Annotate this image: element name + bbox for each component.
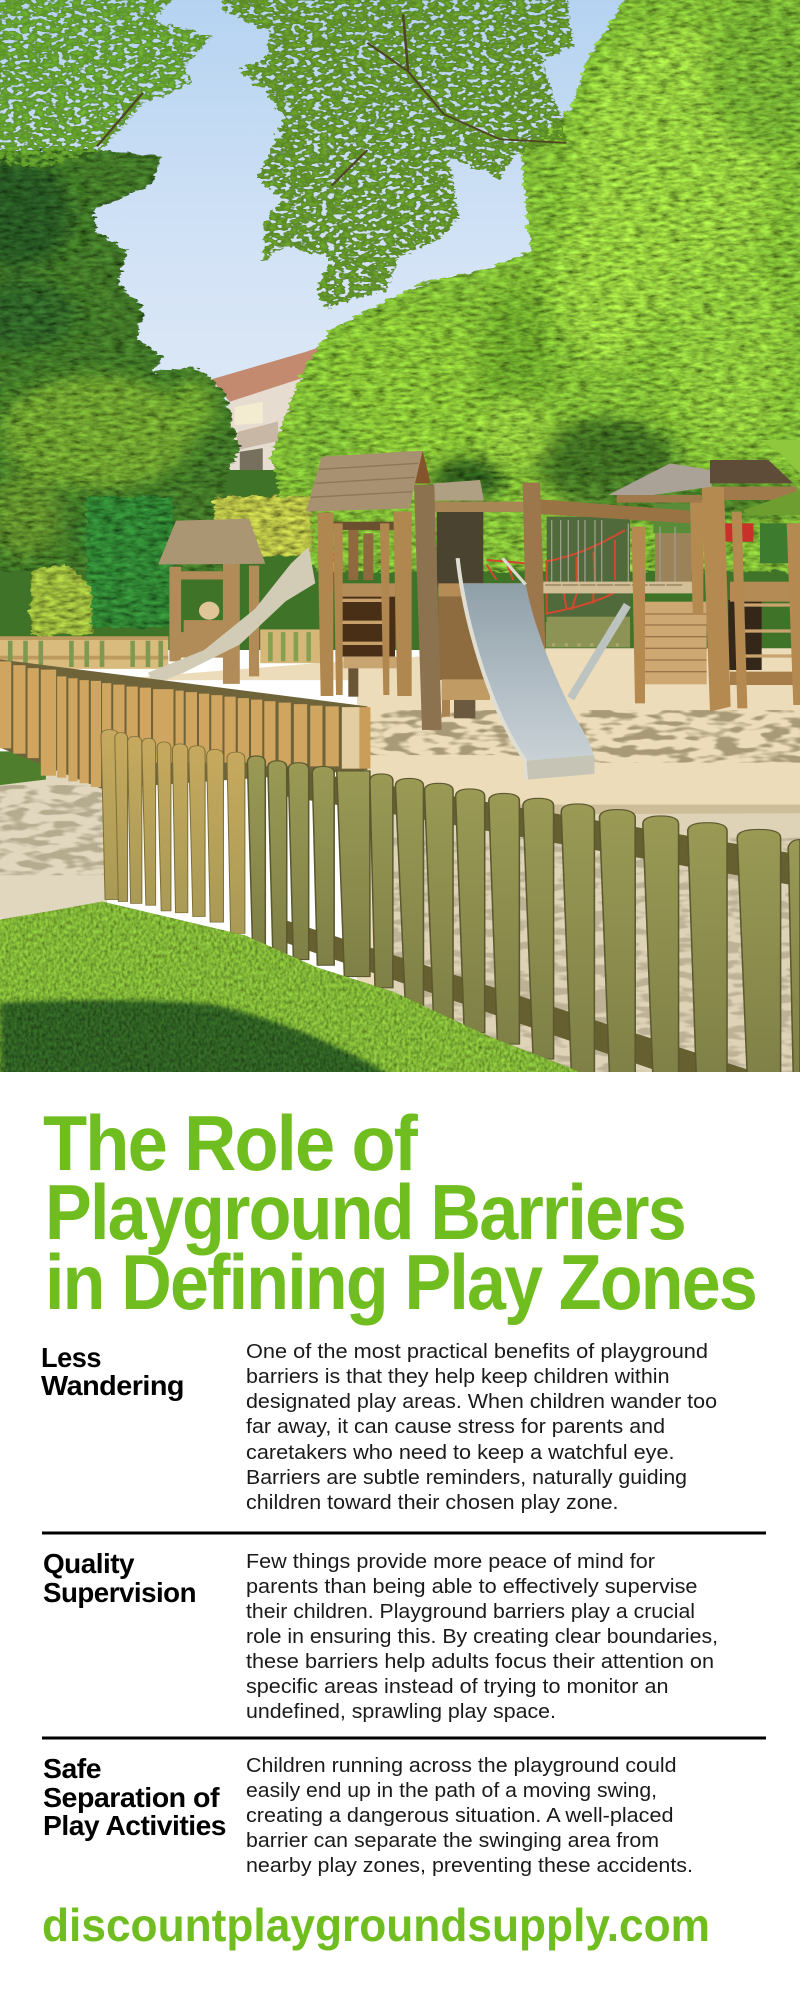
heading: Safe Separation of Play Activities: Play Activities — [43, 1810, 226, 1841]
bushes behind playground — [31, 496, 311, 635]
dark backdrop inside structure — [437, 510, 483, 587]
body text: Quality Supervision: undefined, sprawling play space. — [246, 1700, 556, 1723]
body text: Safe Separation of Play Activities: barrier can separate the swinging area from — [246, 1829, 659, 1852]
fence rails — [286, 768, 800, 1080]
hanging chains — [552, 520, 675, 583]
body text: Less Wandering: Barriers are subtle reminders, naturally guiding — [246, 1466, 687, 1489]
tower posts — [317, 512, 412, 696]
hut posts — [169, 564, 259, 684]
body text: Less Wandering: caretakers who need to keep a watchful eye. — [246, 1441, 674, 1464]
main metal slide — [458, 558, 594, 780]
heading: Quality Supervision: Quality — [43, 1548, 135, 1579]
left fence section behind front fence — [0, 659, 370, 789]
grass lawn — [0, 901, 594, 1085]
right hut roof — [608, 463, 712, 495]
rear roof — [433, 480, 484, 501]
body text: Quality Supervision: parents than being able to effectively supervise — [246, 1575, 698, 1598]
tree branches — [97, 14, 566, 186]
heading: Quality Supervision — [43, 1548, 196, 1608]
body text: Quality Supervision — [246, 1550, 718, 1723]
pine trees on the right — [270, 0, 800, 571]
body text: Less Wandering: children toward their chosen play zone. — [246, 1491, 618, 1514]
title: The Role of — [43, 1099, 419, 1187]
center lower deck — [438, 583, 527, 597]
child in red shirt — [725, 523, 753, 542]
dark tree backdrop behind playground — [0, 470, 800, 650]
heading: Safe Separation of Play Activities: Separation of — [43, 1782, 220, 1813]
small play hut with left slide — [148, 519, 315, 685]
left pickets — [101, 730, 245, 933]
body text: Quality Supervision: these barriers help adults focus their attention on — [246, 1650, 714, 1673]
main wooden play structure — [306, 440, 800, 730]
sky — [0, 0, 625, 408]
body text: Quality Supervision: specific areas instead of trying to monitor an — [246, 1675, 668, 1698]
heading: Safe Separation of Play Activities — [43, 1753, 226, 1841]
body text: Less Wandering: One of the most practical benefits of playground — [246, 1340, 708, 1363]
website url: discountplaygroundsupply.com — [42, 1899, 710, 1951]
title — [43, 1099, 756, 1326]
sand ground — [0, 648, 800, 1080]
upper beams — [435, 502, 523, 512]
metal support pole — [571, 605, 627, 698]
body text: Safe Separation of Play Activities: creating a dangerous situation. A well-placed — [246, 1804, 674, 1827]
hut rabbit figure — [199, 602, 219, 620]
body text: Less Wandering: far away, it can cause stress for parents and — [246, 1415, 665, 1438]
log wall — [645, 602, 707, 684]
body text: Safe Separation of Play Activities: Children running across the playground could — [246, 1754, 676, 1777]
title: Playground Barriers — [45, 1168, 685, 1256]
body text: Safe Separation of Play Activities: easily end up in the path of a moving swing, — [246, 1779, 657, 1802]
body text: Safe Separation of Play Activities: nearby play zones, preventing these accidents. — [246, 1854, 693, 1877]
section: Safe Separation of Play Activities — [43, 1753, 693, 1877]
low fence behind — [547, 617, 630, 643]
heading: Quality Supervision: Supervision — [43, 1577, 196, 1608]
hut roof — [158, 519, 265, 565]
heading: Less Wandering: Wandering — [41, 1370, 184, 1401]
right pickets — [247, 756, 800, 1080]
body text: Quality Supervision: role in ensuring this. By creating clear boundaries, — [246, 1625, 718, 1648]
apartment building — [212, 348, 318, 470]
hanging branch at top center — [97, 0, 574, 307]
large center posts — [414, 485, 442, 730]
trees on the left — [0, 150, 240, 571]
hanging bridge — [543, 582, 698, 593]
tower ladder — [342, 593, 395, 657]
body text: Less Wandering: designated play areas. When children wander too — [246, 1390, 717, 1413]
pine overhang on right roof — [760, 440, 800, 473]
rope net — [487, 530, 625, 615]
right climbing section — [728, 600, 762, 670]
heading: Less Wandering: Less — [41, 1342, 101, 1373]
heading: Less Wandering — [41, 1342, 184, 1401]
foliage top left — [0, 0, 212, 168]
tower roof — [306, 451, 423, 512]
left metal slide — [148, 547, 315, 685]
section: Less Wandering — [41, 1340, 717, 1514]
section: Quality Supervision — [43, 1548, 718, 1723]
back fence — [0, 622, 630, 669]
body text: Quality Supervision: their children. Playground barriers play a crucial — [246, 1600, 695, 1623]
body text: Safe Separation of Play Activities — [246, 1754, 693, 1877]
heading: Safe Separation of Play Activities: Safe — [43, 1753, 101, 1784]
body text: Quality Supervision: Few things provide more peace of mind for — [246, 1550, 655, 1573]
body text: Less Wandering — [246, 1340, 717, 1514]
front picket fence — [101, 730, 800, 1080]
photo: playground with wooden fence — [0, 0, 800, 1085]
body text: Less Wandering: barriers is that they help keep children within — [246, 1365, 670, 1388]
right structure posts — [632, 487, 800, 712]
